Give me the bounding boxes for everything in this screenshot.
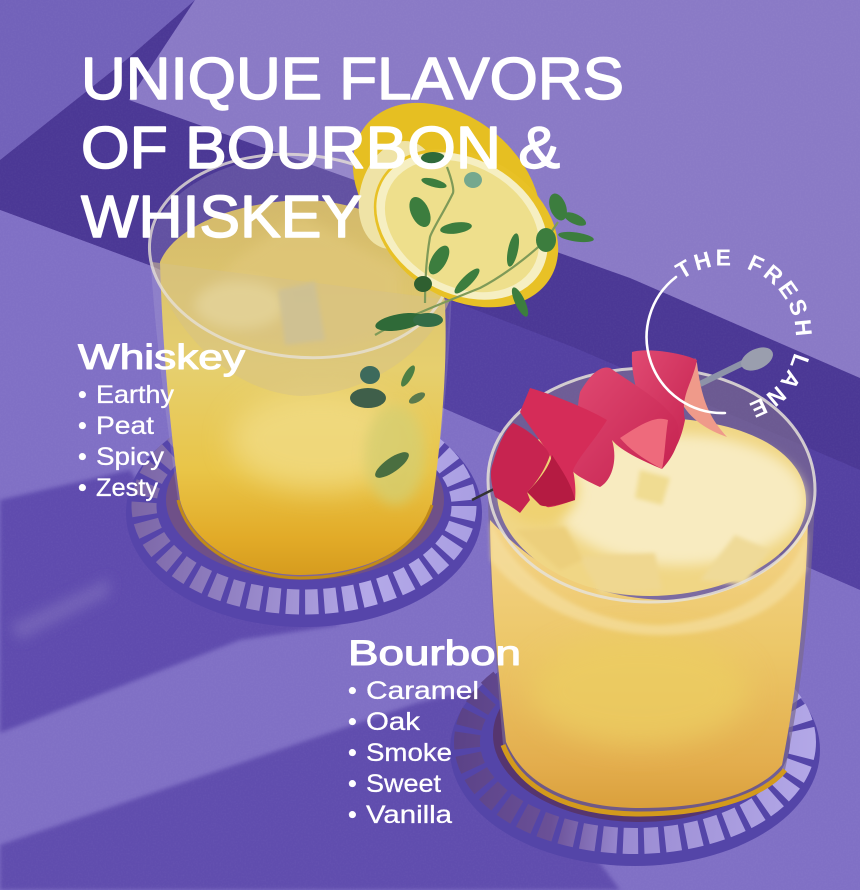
bourbon flavor list: • — [348, 708, 357, 736]
bourbon flavor list: Caramel — [366, 677, 479, 705]
bourbon flavor list — [348, 634, 521, 829]
bourbon flavor list: Bourbon — [348, 634, 521, 673]
whiskey flavor list: • — [78, 443, 87, 471]
whiskey flavor list: Zesty — [96, 474, 159, 502]
bourbon flavor list: Smoke — [366, 739, 452, 767]
coaster: whiskey glass — [126, 399, 482, 627]
bourbon flavor list: • — [348, 677, 357, 705]
bourbon flavor list: • — [348, 801, 357, 829]
whiskey flavor list — [78, 338, 246, 502]
bourbon flavor list: Vanilla — [366, 801, 452, 829]
lemon slices — [318, 66, 587, 339]
whiskey flavor list: Peat — [96, 412, 154, 440]
bourbon flavor list: Oak — [366, 708, 421, 736]
whiskey flavor list: • — [78, 474, 87, 502]
thyme sprig — [374, 152, 594, 335]
title — [81, 46, 624, 250]
bourbon flavor list: • — [348, 739, 357, 767]
title: UNIQUE FLAVORS — [81, 46, 624, 112]
bourbon glass — [488, 368, 815, 814]
whiskey flavor list: Whiskey — [78, 338, 246, 377]
bourbon flavor list: Sweet — [366, 770, 441, 798]
coaster: bourbon glass — [450, 634, 820, 866]
whiskey flavor list: Earthy — [96, 381, 175, 409]
title: WHISKEY — [81, 184, 362, 250]
whiskey flavor list: • — [78, 381, 87, 409]
whiskey flavor list: Spicy — [96, 443, 165, 471]
title: OF BOURBON & — [81, 115, 560, 181]
whiskey glass — [139, 140, 461, 578]
bourbon flavor list: • — [348, 770, 357, 798]
whiskey flavor list: • — [78, 412, 87, 440]
rhubarb garnish on skewer — [472, 343, 777, 513]
badge: The Fresh Lane: THE FRESH LANE — [674, 250, 812, 418]
